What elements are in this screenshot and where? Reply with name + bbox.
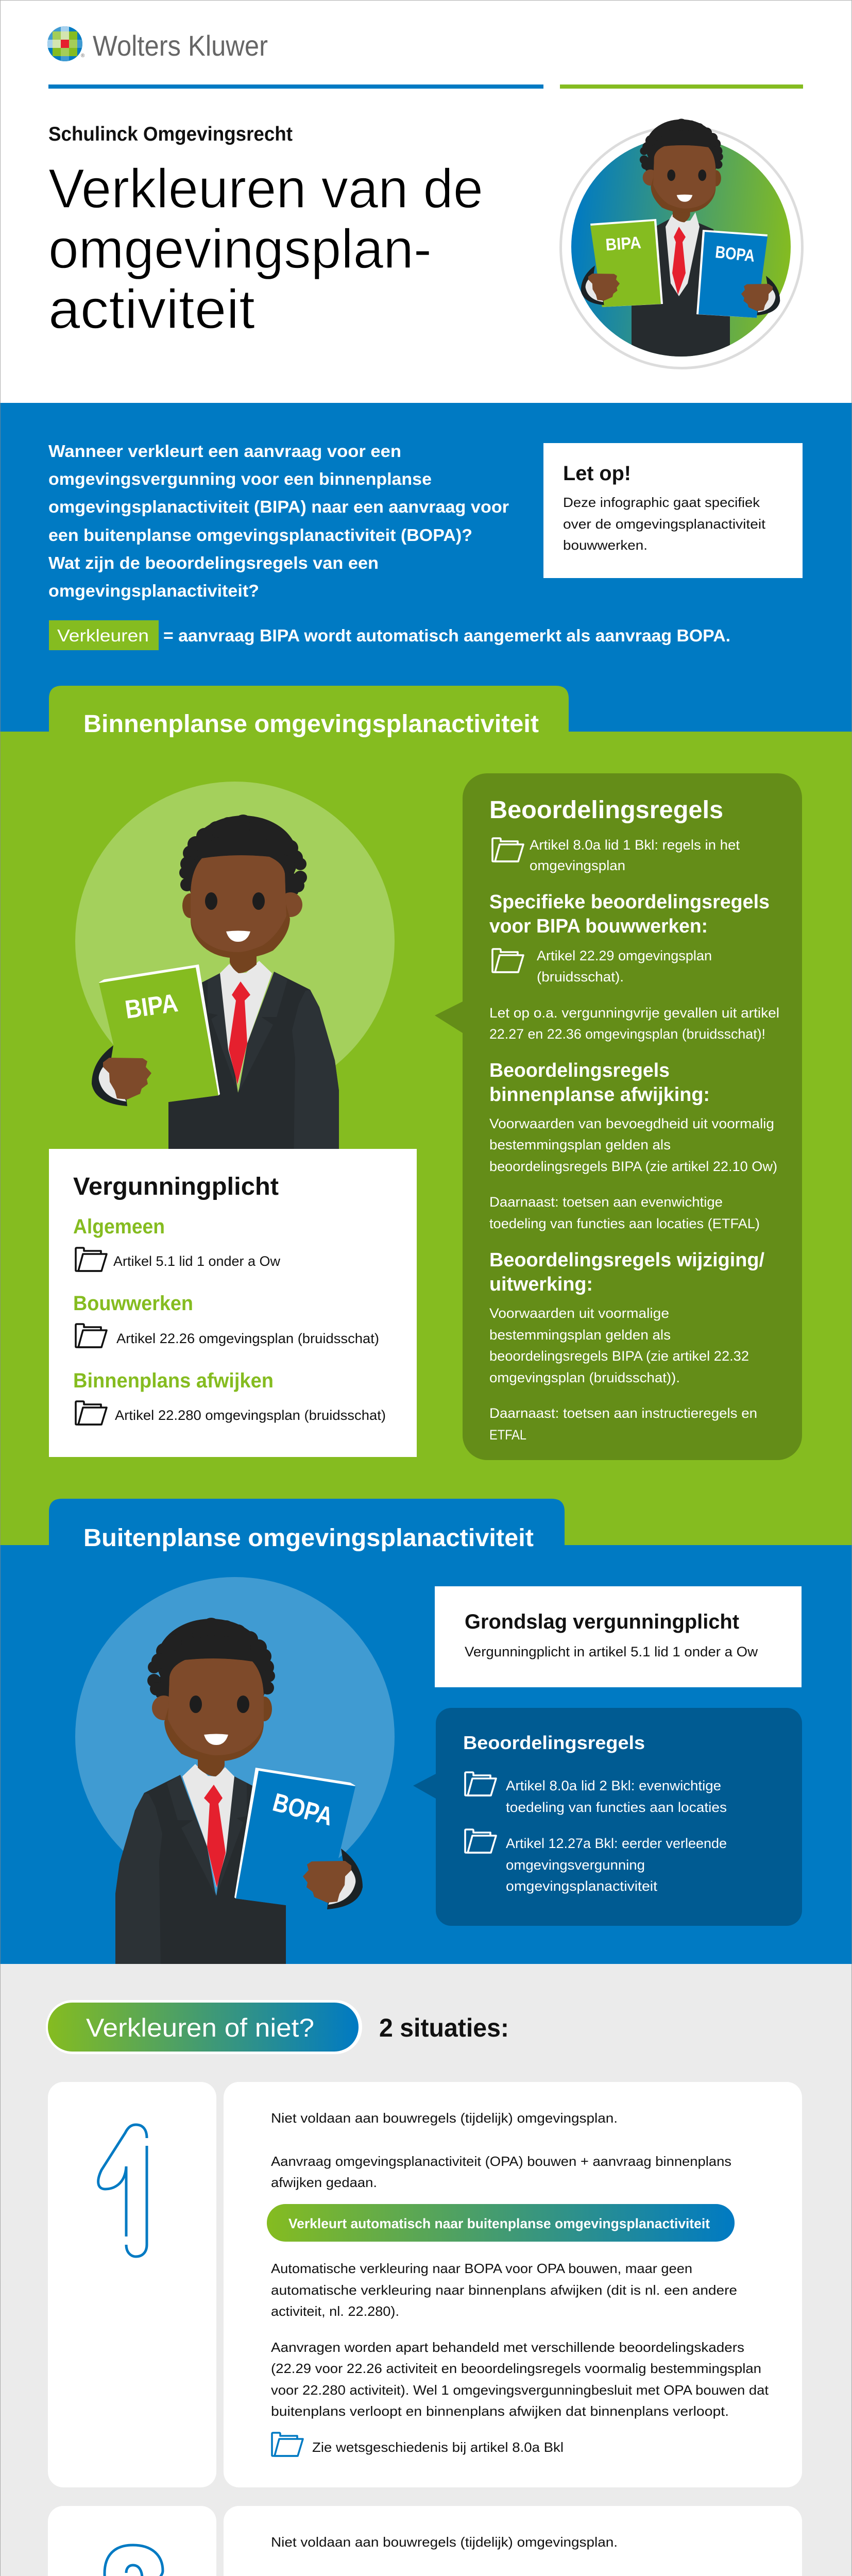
illustration: man with BIPA book xyxy=(92,815,339,1165)
logo: Wolters Kluwer: Wolters Kluwer xyxy=(93,29,268,62)
title: omgevingsplan- xyxy=(48,217,432,280)
title: Verkleuren van de xyxy=(48,157,483,219)
panel: Beoordelingsregels BIPA: Daarnaast: toetsen aan instructieregels en xyxy=(489,1405,757,1421)
panel: Beoordelingsregels BOPA: omgevingsvergunning xyxy=(506,1857,645,1873)
intro question text: omgevingsplanactiviteit (BIPA) naar een aanvraag voor xyxy=(48,497,509,516)
panel: Beoordelingsregels BIPA: Artikel 22.29 omgevingsplan xyxy=(537,948,712,963)
card: situation 1 text: buitenplans verloopt en binnenplans afwijken dat binnenplans verloopt. xyxy=(271,2403,729,2419)
panel: Beoordelingsregels BIPA: beoordelingsregels BIPA (zie artikel 22.10 Ow) xyxy=(489,1159,777,1174)
panel: Vergunningplicht xyxy=(49,1149,417,1457)
badge: Verkleuren of niet? xyxy=(46,2000,362,2054)
definition: Verkleuren: = aanvraag BIPA wordt automatisch aangemerkt als aanvraag BOPA. xyxy=(163,626,730,645)
panel: Beoordelingsregels BIPA: ETFAL xyxy=(489,1427,526,1443)
intro question text: Wat zijn de beoordelingsregels van een xyxy=(48,553,379,572)
card: situation 1 text: automatische verkleuring naar binnenplans afwijken (dit is nl. een andere xyxy=(271,2282,737,2298)
header rule: green xyxy=(560,84,803,89)
panel: Beoordelingsregels BIPA: Artikel 8.0a lid 1 Bkl: regels in het xyxy=(530,837,740,853)
panel: Grondslag vergunningplicht: Grondslag vergunningplicht xyxy=(465,1611,739,1633)
section: intro (blue) xyxy=(0,403,852,733)
panel: Beoordelingsregels BIPA: Beoordelingsregels xyxy=(489,1060,670,1081)
panel: Beoordelingsregels BIPA: Voorwaarden van bevoegdheid uit voormalig xyxy=(489,1116,774,1131)
card: situation 1 text: Zie wetsgeschiedenis bij artikel 8.0a Bkl xyxy=(312,2439,564,2455)
panel: Beoordelingsregels BOPA xyxy=(413,1708,802,1926)
blue background with tab xyxy=(0,1499,852,1964)
illustration: man with BIPA and BOPA books: BOPA xyxy=(714,242,756,265)
panel: Beoordelingsregels BIPA: Beoordelingsregels xyxy=(489,796,723,824)
heading: Binnenplanse: Binnenplanse omgevingsplanactiviteit xyxy=(83,710,539,738)
callout: Let op: over de omgevingsplanactiviteit xyxy=(563,516,766,532)
card: situation 1 text: voor 22.280 activiteit). Wel 1 omgevingsvergunningbesluit met OPA bouwen dat xyxy=(271,2382,769,2398)
callout: Let op: Deze infographic gaat specifiek xyxy=(563,495,760,510)
panel: Vergunningplicht: Artikel 22.280 omgevingsplan (bruidsschat) xyxy=(115,1408,386,1423)
panel: Beoordelingsregels BIPA: Beoordelingsregels wijziging/ xyxy=(489,1249,764,1271)
panel: Vergunningplicht: Algemeen xyxy=(73,1215,165,1238)
panel: Beoordelingsregels BIPA: beoordelingsregels BIPA (zie artikel 22.32 xyxy=(489,1348,749,1364)
heading: Buitenplanse: Buitenplanse omgevingsplanactiviteit xyxy=(83,1524,534,1552)
panel: Beoordelingsregels BIPA xyxy=(435,773,802,1460)
logo: Wolters Kluwer xyxy=(47,26,268,62)
card: situation 1 text: afwijken gedaan. xyxy=(271,2175,377,2190)
brand line: Schulinck Omgevingsrecht xyxy=(48,123,293,145)
card: situation 2 text xyxy=(224,2506,802,2576)
intro question text: omgevingsplanactiviteit? xyxy=(48,581,259,600)
card: situation 1 text: Aanvragen worden apart behandeld met verschillende beoordelingskaders xyxy=(271,2340,744,2355)
intro question text: omgevingsvergunning voor een binnenplanse xyxy=(48,469,432,488)
panel: Beoordelingsregels BIPA: Specifieke beoordelingsregels xyxy=(489,891,770,913)
panel: Beoordelingsregels BOPA: toedeling van functies aan locaties xyxy=(506,1800,727,1815)
intro question text: een buitenplanse omgevingsplanactiviteit (BOPA)? xyxy=(48,526,472,545)
card: situation 2 text: Niet voldaan aan bouwregels (tijdelijk) omgevingsplan. xyxy=(271,2534,618,2550)
panel: Beoordelingsregels BOPA: Artikel 8.0a lid 2 Bkl: evenwichtige xyxy=(506,1778,721,1793)
panel: Beoordelingsregels BIPA: omgevingsplan (bruidsschat)). xyxy=(489,1370,680,1385)
illustration: man with BIPA book: BIPA xyxy=(123,988,180,1024)
illustration: man with BOPA book: BOPA xyxy=(270,1788,336,1831)
panel: Vergunningplicht: Binnenplans afwijken xyxy=(73,1369,274,1392)
callout: Let op: bouwwerken. xyxy=(563,537,647,553)
illustration: man with BIPA and BOPA books: BIPA xyxy=(605,233,642,254)
panel: Beoordelingsregels BIPA: (bruidsschat). xyxy=(537,969,624,985)
illustration: man with BIPA and BOPA books xyxy=(560,118,803,368)
section: Buitenplanse omgevingsplanactiviteit (blue) xyxy=(0,1499,852,1969)
card: situation 1 text: activiteit, nl. 22.280). xyxy=(271,2303,399,2319)
panel: Beoordelingsregels BIPA: Let op o.a. vergunningvrije gevallen uit artikel xyxy=(489,1005,779,1021)
panel: Beoordelingsregels BIPA: omgevingsplan xyxy=(530,858,625,873)
panel: Grondslag vergunningplicht: Vergunningplicht in artikel 5.1 lid 1 onder a Ow xyxy=(465,1644,758,1659)
intro question text xyxy=(48,442,509,600)
badge: Verkleuren of niet?: Verkleuren of niet? xyxy=(86,2013,314,2042)
card: situation number 2 xyxy=(48,2506,216,2576)
title: activiteit xyxy=(48,278,255,340)
panel: Beoordelingsregels BIPA: voor BIPA bouwwerken: xyxy=(489,916,708,937)
panel: Vergunningplicht: Artikel 22.26 omgevingsplan (bruidsschat) xyxy=(116,1331,379,1346)
panel: Beoordelingsregels BIPA: uitwerking: xyxy=(489,1274,593,1295)
panel: Beoordelingsregels BIPA: bestemmingsplan gelden als xyxy=(489,1327,671,1343)
heading: 2 situaties: 2 situaties: xyxy=(379,2013,509,2042)
card: situation 1 text: (22.29 voor 22.26 activiteit en beoordelingsregels voormalig bestemmingsplan xyxy=(271,2361,761,2376)
green background with tab xyxy=(0,686,852,1545)
backdrop circle xyxy=(75,1577,395,1896)
panel: Beoordelingsregels BIPA: Voorwaarden uit voormalige xyxy=(489,1306,669,1321)
callout: Let op: Let op! xyxy=(563,462,631,485)
panel: Vergunningplicht: Artikel 5.1 lid 1 onder a Ow xyxy=(113,1253,280,1269)
title xyxy=(48,157,483,340)
panel: Grondslag vergunningplicht xyxy=(435,1586,802,1687)
intro background xyxy=(0,403,852,733)
card: situation 1 text: Niet voldaan aan bouwregels (tijdelijk) omgevingsplan. xyxy=(271,2110,618,2126)
card: situation number 1 xyxy=(48,2082,216,2487)
panel: Beoordelingsregels BOPA: omgevingsplanactiviteit xyxy=(506,1878,658,1894)
panel: Beoordelingsregels BIPA: binnenplanse afwijking: xyxy=(489,1084,710,1106)
card: situation 1 text xyxy=(224,2082,802,2487)
backdrop circle xyxy=(75,782,395,1101)
panel: Vergunningplicht: Vergunningplicht xyxy=(73,1173,279,1200)
card: situation 1 text: Verkleurt automatisch naar buitenplanse omgevingsplanactiviteit xyxy=(288,2216,710,2231)
panel: Beoordelingsregels BIPA: bestemmingsplan gelden als xyxy=(489,1137,671,1153)
panel: Beoordelingsregels BIPA: Daarnaast: toetsen aan evenwichtige xyxy=(489,1194,723,1210)
card: situation 1 text: Automatische verkleuring naar BOPA voor OPA bouwen, maar geen xyxy=(271,2261,692,2276)
callout: Let op xyxy=(543,443,803,578)
definition: Verkleuren xyxy=(49,620,730,650)
panel: Beoordelingsregels BOPA: Artikel 12.27a Bkl: eerder verleende xyxy=(506,1836,727,1851)
grey background xyxy=(0,1964,852,2576)
illustration: man with BOPA book xyxy=(115,1618,363,1969)
header rule: blue xyxy=(48,84,543,89)
header xyxy=(47,26,803,368)
logo: Wolters Kluwer: ® xyxy=(81,53,85,59)
panel: Beoordelingsregels BIPA: 22.27 en 22.36 omgevingsplan (bruidsschat)! xyxy=(489,1026,765,1042)
panel: Beoordelingsregels BIPA: toedeling van functies aan locaties (ETFAL) xyxy=(489,1216,760,1231)
intro question text: Wanneer verkleurt een aanvraag voor een xyxy=(48,442,401,461)
card: situation 1 text: Aanvraag omgevingsplanactiviteit (OPA) bouwen + aanvraag binnenplans xyxy=(271,2154,731,2169)
panel: Beoordelingsregels BOPA: Beoordelingsregels xyxy=(463,1732,645,1753)
section: Verkleuren of niet (grey) xyxy=(0,1964,852,2576)
panel: Vergunningplicht: Bouwwerken xyxy=(73,1292,193,1315)
section: Binnenplanse omgevingsplanactiviteit (green) xyxy=(0,686,852,1545)
definition: Verkleuren: Verkleuren xyxy=(57,626,149,645)
